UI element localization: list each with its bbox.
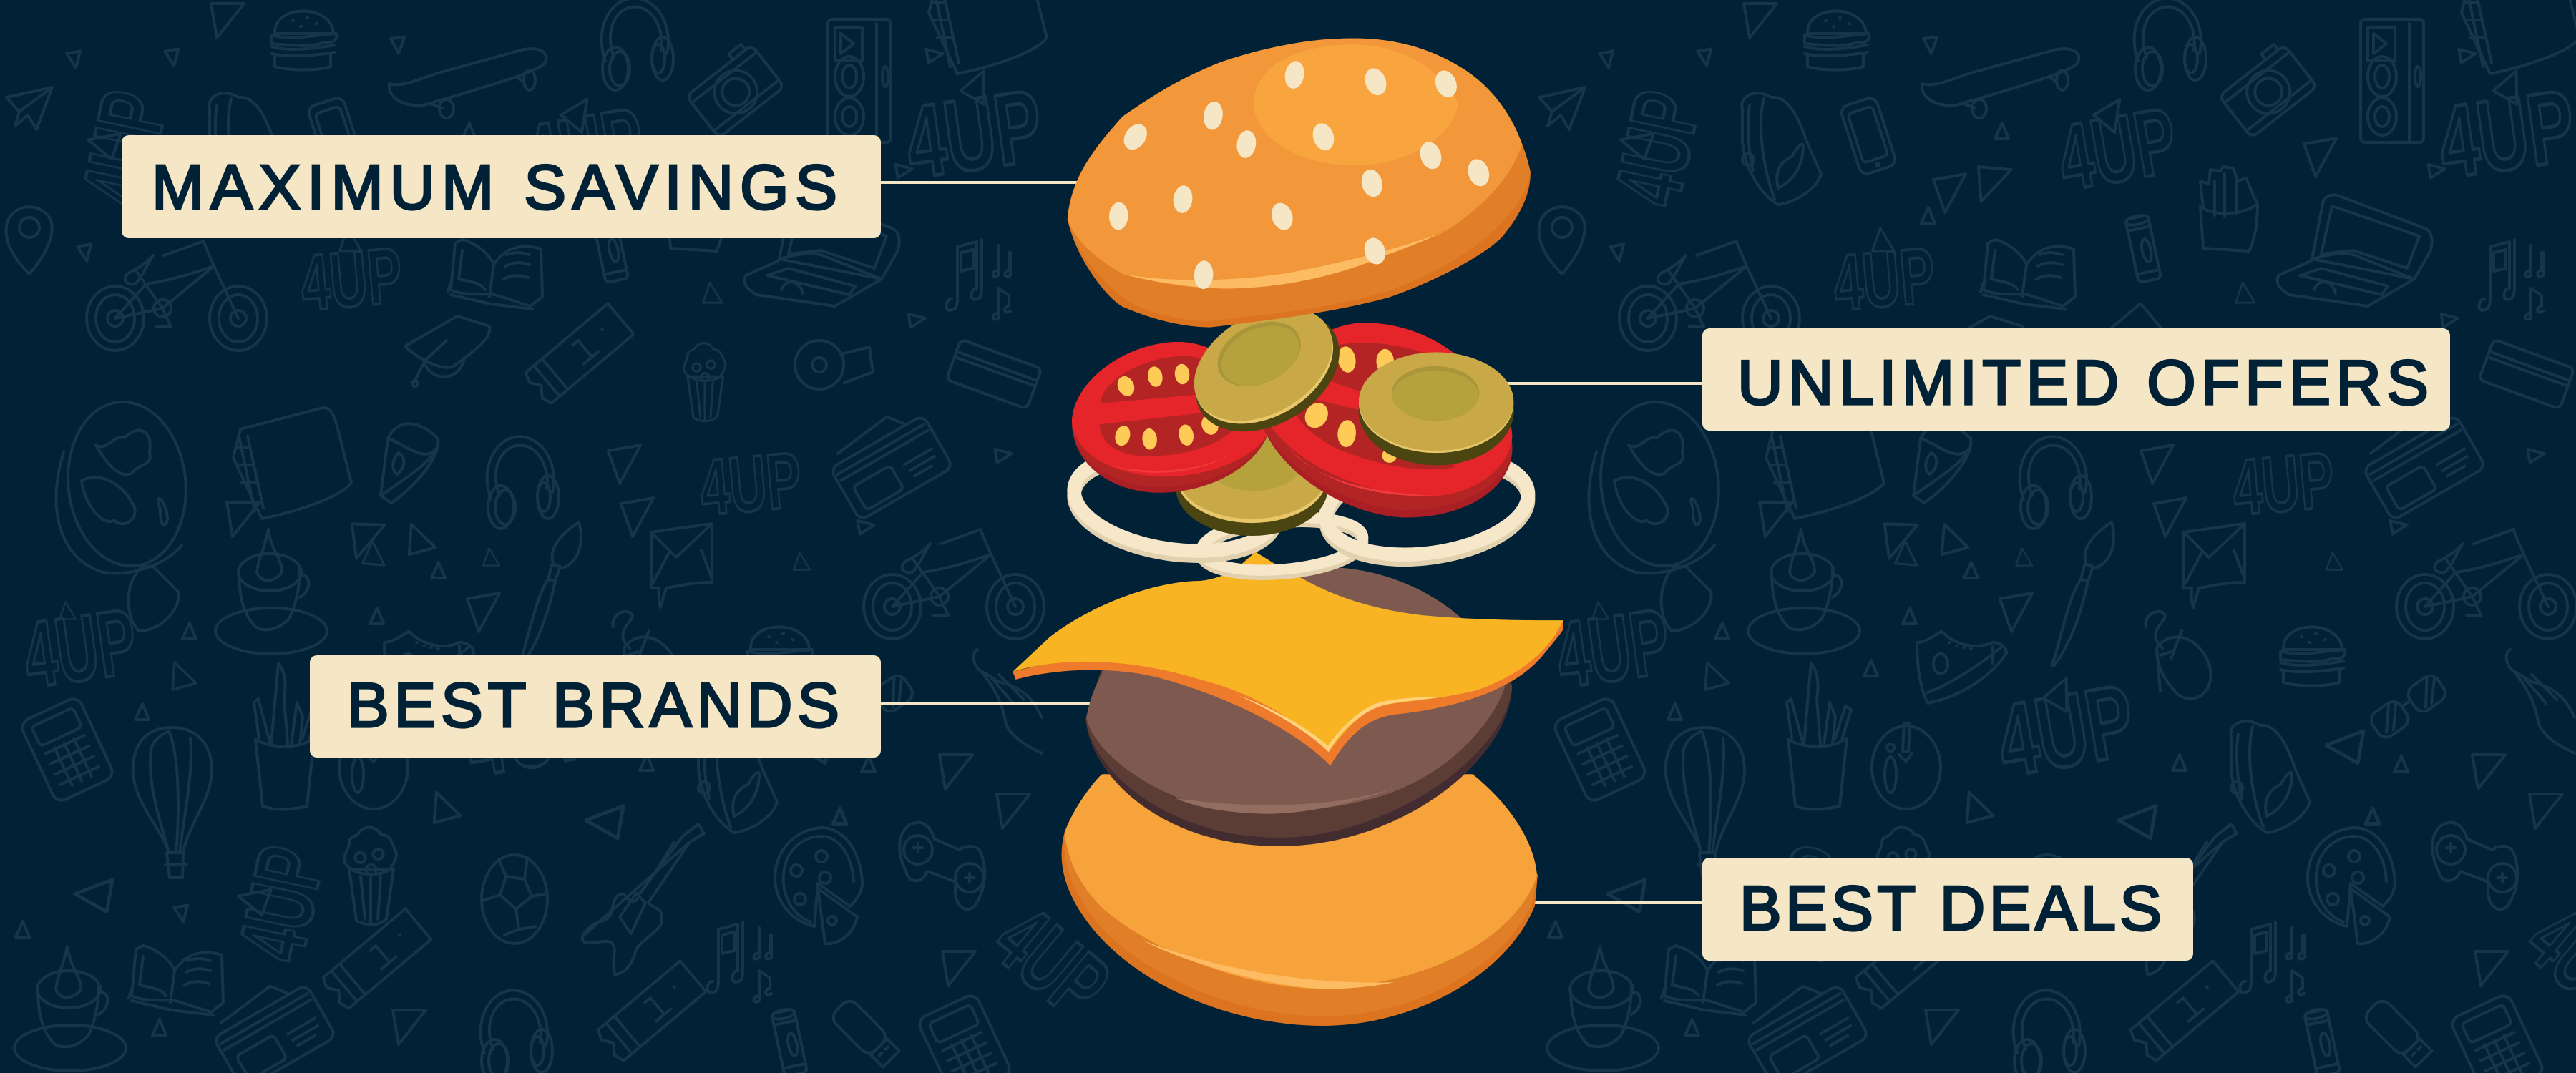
label: maximum savings: MAXIMUM SAVINGS [152, 152, 837, 222]
top bun with sesame seeds [1068, 39, 1531, 328]
label: best brands: BEST BRANDS [347, 670, 839, 740]
connector line: maximum savings [877, 181, 1080, 184]
left tomato [1072, 342, 1267, 493]
pickle slices and tomato slices [1072, 284, 1514, 536]
label: best brands [310, 655, 881, 758]
connector line: best deals [1531, 901, 1707, 904]
label: maximum savings [122, 135, 881, 238]
burger patty [1085, 567, 1512, 846]
burger illustration [1013, 39, 1563, 1026]
bottom pickle [1176, 430, 1328, 536]
label: best deals [1702, 858, 2193, 961]
label: best deals: BEST DEALS [1740, 873, 2162, 944]
bottom bun [1062, 774, 1538, 1026]
top-left pickle [1174, 284, 1360, 456]
connector line: unlimited offers [1499, 382, 1707, 385]
label: unlimited offers: UNLIMITED OFFERS [1737, 347, 2429, 418]
right tomato [1263, 323, 1512, 517]
connector line: best brands [877, 702, 1095, 705]
cheese slice [1013, 552, 1563, 765]
right pickle [1358, 352, 1514, 466]
onion rings [1068, 441, 1535, 581]
label: unlimited offers [1702, 328, 2450, 431]
